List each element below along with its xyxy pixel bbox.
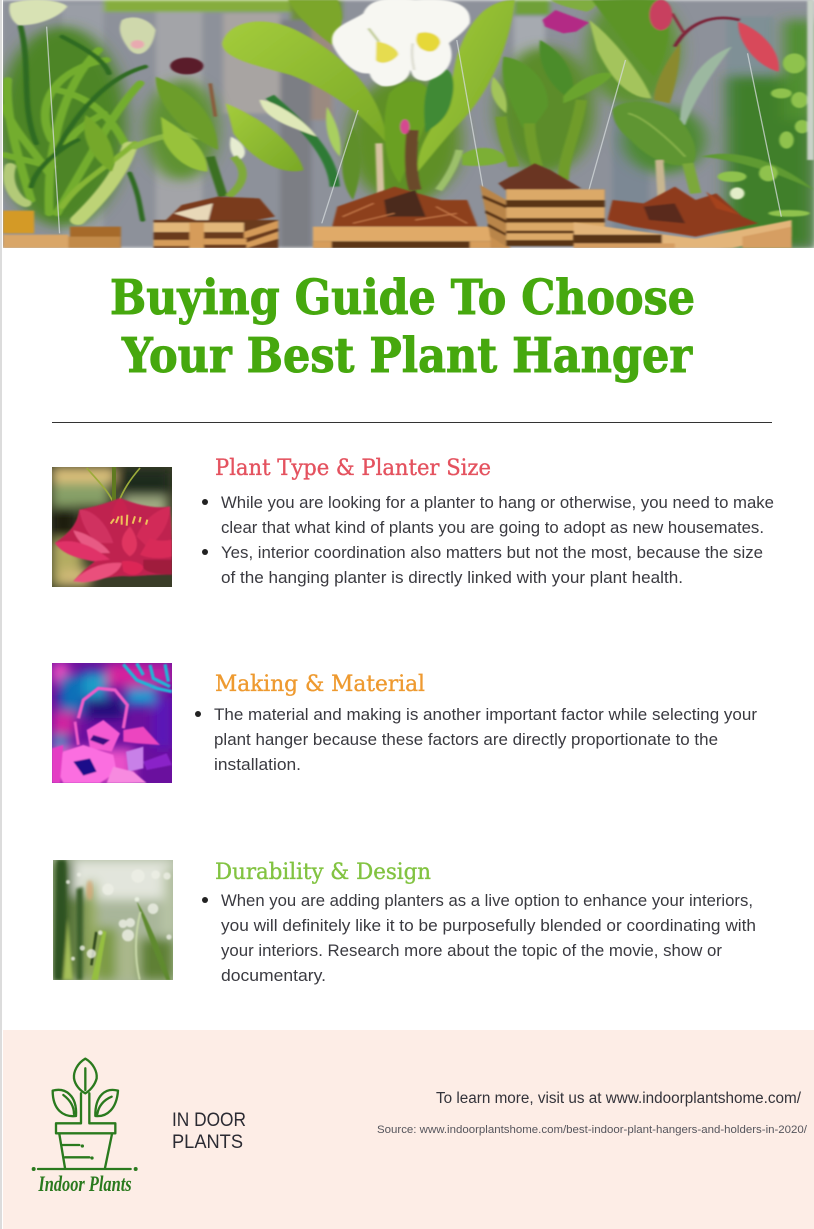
bullet list: clear that what kind of plants you are going to adopt as new housemates. <box>221 519 764 537</box>
bullet list: plant hanger because these factors are directly proportionate to the <box>214 731 718 749</box>
heading: Plant Type & Planter Size <box>215 456 491 481</box>
right-middle plant <box>491 10 614 180</box>
fence background <box>0 0 814 248</box>
bullet list: you will definitely like it to be purposefully blended or coordinating with <box>221 917 756 935</box>
bullet list <box>202 494 774 587</box>
heading: Making & Material <box>215 672 425 697</box>
bullet list: of the hanging planter is directly linked with your plant health. <box>221 569 683 587</box>
logo: indoor plants pot <box>32 1059 138 1196</box>
call to action: To learn more, visit us at www.indoorplantshome.com/ <box>436 1090 802 1107</box>
bullet list: When you are adding planters as a live option to enhance your interiors, <box>221 892 753 910</box>
panel: durability and design <box>53 860 756 985</box>
right planter <box>574 187 792 248</box>
lily body <box>55 498 172 582</box>
brand name <box>172 1109 246 1153</box>
bullet list: While you are looking for a planter to hang or otherwise, you need to make <box>221 494 774 512</box>
bullet list <box>195 706 758 774</box>
right foliage <box>717 0 814 217</box>
bullet list: Yes, interior coordination also matters but not the most, because the size <box>221 544 763 562</box>
title <box>110 270 695 384</box>
title: Your Best Plant Hanger <box>121 328 693 384</box>
central plant: large leaves <box>222 0 515 217</box>
centre planter <box>313 187 511 248</box>
footer panel <box>3 1030 814 1229</box>
bullet list: your interiors. Research more about the topic of the movie, show or <box>221 942 723 960</box>
planter far left <box>3 211 121 248</box>
bullet list <box>202 892 756 985</box>
heading: Durability & Design <box>215 860 431 885</box>
bullet list: documentary. <box>221 967 326 985</box>
logo wordmark: Indoor Plants <box>38 1171 132 1196</box>
white orchid flower <box>332 0 470 86</box>
foliage underpainting <box>0 0 814 248</box>
right plant with pink buds <box>550 0 814 200</box>
brand name: PLANTS <box>172 1131 243 1153</box>
slatted planter <box>480 163 605 247</box>
hero photo: hanging orchids in wooden planters <box>0 0 814 248</box>
image: grass with dew drops <box>53 860 173 980</box>
image: pink water lily <box>52 467 172 587</box>
brand name: IN DOOR <box>172 1109 246 1131</box>
hanging wires <box>47 27 781 233</box>
second plant with bud <box>156 58 341 197</box>
left plant <box>5 27 197 220</box>
image: pink and blue paper shapes <box>52 663 172 783</box>
panel: making and material <box>52 663 758 783</box>
title: Buying Guide To Choose <box>110 270 695 326</box>
bullet list: The material and making is another important factor while selecting your <box>214 706 758 724</box>
bullet list: installation. <box>214 756 301 774</box>
source: Source: www.indoorplantshome.com/best-indoor-plant-hangers-and-holders-in-2020/ <box>377 1124 808 1136</box>
panel: plant type and planter size <box>52 456 774 587</box>
planter two <box>154 197 278 248</box>
